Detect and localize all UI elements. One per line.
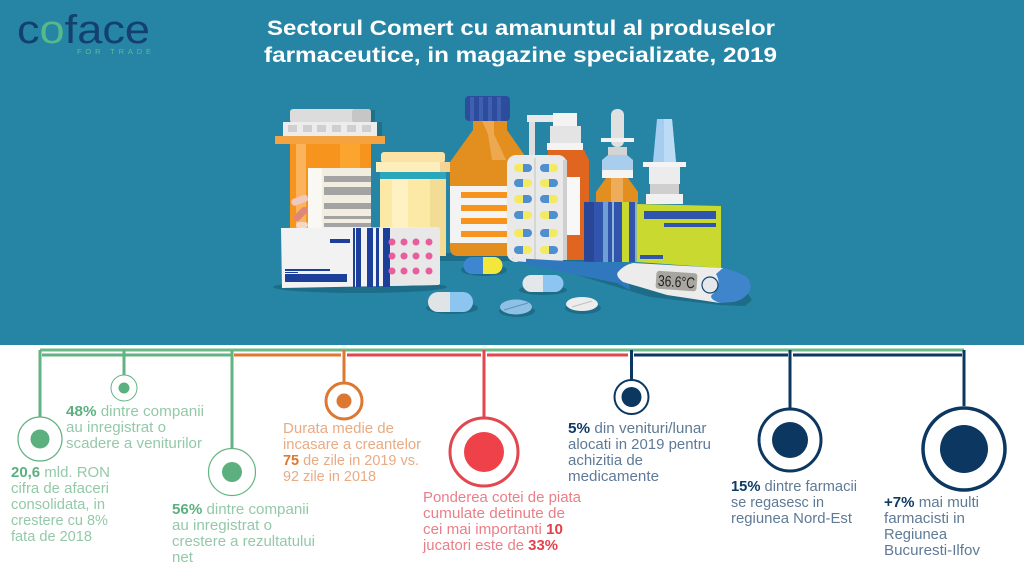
stat: +7%: Regiunea — [884, 527, 948, 543]
stat: 56%: 56% dintre companii — [172, 502, 309, 518]
stat: 75 de zile: 75 de zile in 2019 vs. — [283, 453, 419, 469]
stat: 20,6 mld RON: cifra de afaceri — [11, 481, 109, 497]
stat: 20,6 mld RON: 20,6 mld. RON — [11, 465, 110, 481]
stat: 5%: 5% din venituri/lunar — [568, 421, 707, 437]
icon: thermometer: 36.6°C — [657, 273, 695, 292]
stat: 15%: se regasesc in — [731, 495, 824, 511]
icon: white medicine box — [281, 227, 440, 288]
stat: 33%: cei mai importanti 10 — [423, 522, 563, 538]
stat: +7% — [884, 350, 1005, 559]
stat: 15%: regiunea Nord-Est — [731, 511, 852, 527]
logo: coface for trade: FOR TRADE — [77, 47, 151, 56]
stat: 20,6 mld RON: crestere cu 8% — [11, 513, 108, 529]
stat: 33%: jucatori este de 33% — [422, 538, 558, 554]
icon: green medicine box — [584, 202, 721, 268]
stat: 75 de zile: 92 zile in 2018 — [283, 469, 376, 485]
stat: 5%: achizitia de — [568, 453, 643, 469]
icon: ground shadows — [273, 253, 752, 317]
icon: amber bottle — [450, 96, 530, 256]
stat: 15% — [731, 350, 857, 527]
icon: white tablet — [566, 297, 598, 311]
title: farmaceutice, in magazine specializate, 2019 — [264, 44, 777, 67]
icon: dropper bottle — [596, 109, 638, 203]
icon: spray bottle — [527, 113, 589, 260]
icon: nasal spray — [643, 119, 686, 204]
illustration: medicine products — [273, 96, 752, 317]
stat: +7%: farmacisti in — [884, 511, 965, 527]
stat: 56%: crestere a rezultatului — [172, 534, 315, 550]
title: Sectorul Comert cu amanuntul al produselor — [267, 17, 775, 40]
stat: 75 de zile: Durata medie de — [283, 421, 394, 437]
stat: 33%: Ponderea cotei de piata — [423, 490, 582, 506]
header panel background — [0, 0, 1024, 345]
logo: coface for trade: coface — [17, 8, 150, 52]
stat: 56%: net — [172, 550, 193, 566]
stat: +7%: +7% mai multi — [884, 495, 979, 511]
stat: 20,6 mld RON: fata de 2018 — [11, 529, 92, 545]
icon: blue tablet — [500, 300, 532, 314]
stat: 5% — [568, 350, 711, 485]
stat: 20,6 mld RON — [11, 350, 110, 545]
stat: 56% — [172, 350, 315, 566]
stat: 5%: alocati in 2019 pentru — [568, 437, 711, 453]
icon: blue yellow capsule — [464, 257, 503, 274]
stat: 33% — [422, 350, 582, 554]
icon: blister pack — [507, 155, 567, 262]
title — [264, 17, 777, 67]
stat: 75 de zile: incasare a creantelor — [283, 437, 421, 453]
stat: 48%: scadere a veniturilor — [66, 436, 202, 452]
stat: 33%: cumulate detinute de — [423, 506, 565, 522]
timeline connector lines — [40, 350, 964, 355]
icon: grey blue capsule — [428, 292, 473, 312]
icon: orange pill bottle — [275, 109, 385, 234]
icon: yellow jar — [376, 152, 450, 256]
stat: +7%: Bucuresti-Ilfov — [884, 543, 981, 559]
stat: 20,6 mld RON: consolidata, in — [11, 497, 105, 513]
stat: 48% — [66, 350, 204, 452]
stat: 48%: au inregistrat o — [66, 420, 166, 436]
stat: 5%: medicamente — [568, 469, 659, 485]
stat: 48%: 48% dintre companii — [66, 404, 204, 420]
stat: 75 de zile — [283, 350, 421, 485]
stat: 56%: au inregistrat o — [172, 518, 272, 534]
icon: second capsule — [522, 275, 564, 292]
stat: 15%: 15% dintre farmacii — [731, 479, 857, 495]
icon: thermometer — [512, 256, 751, 303]
